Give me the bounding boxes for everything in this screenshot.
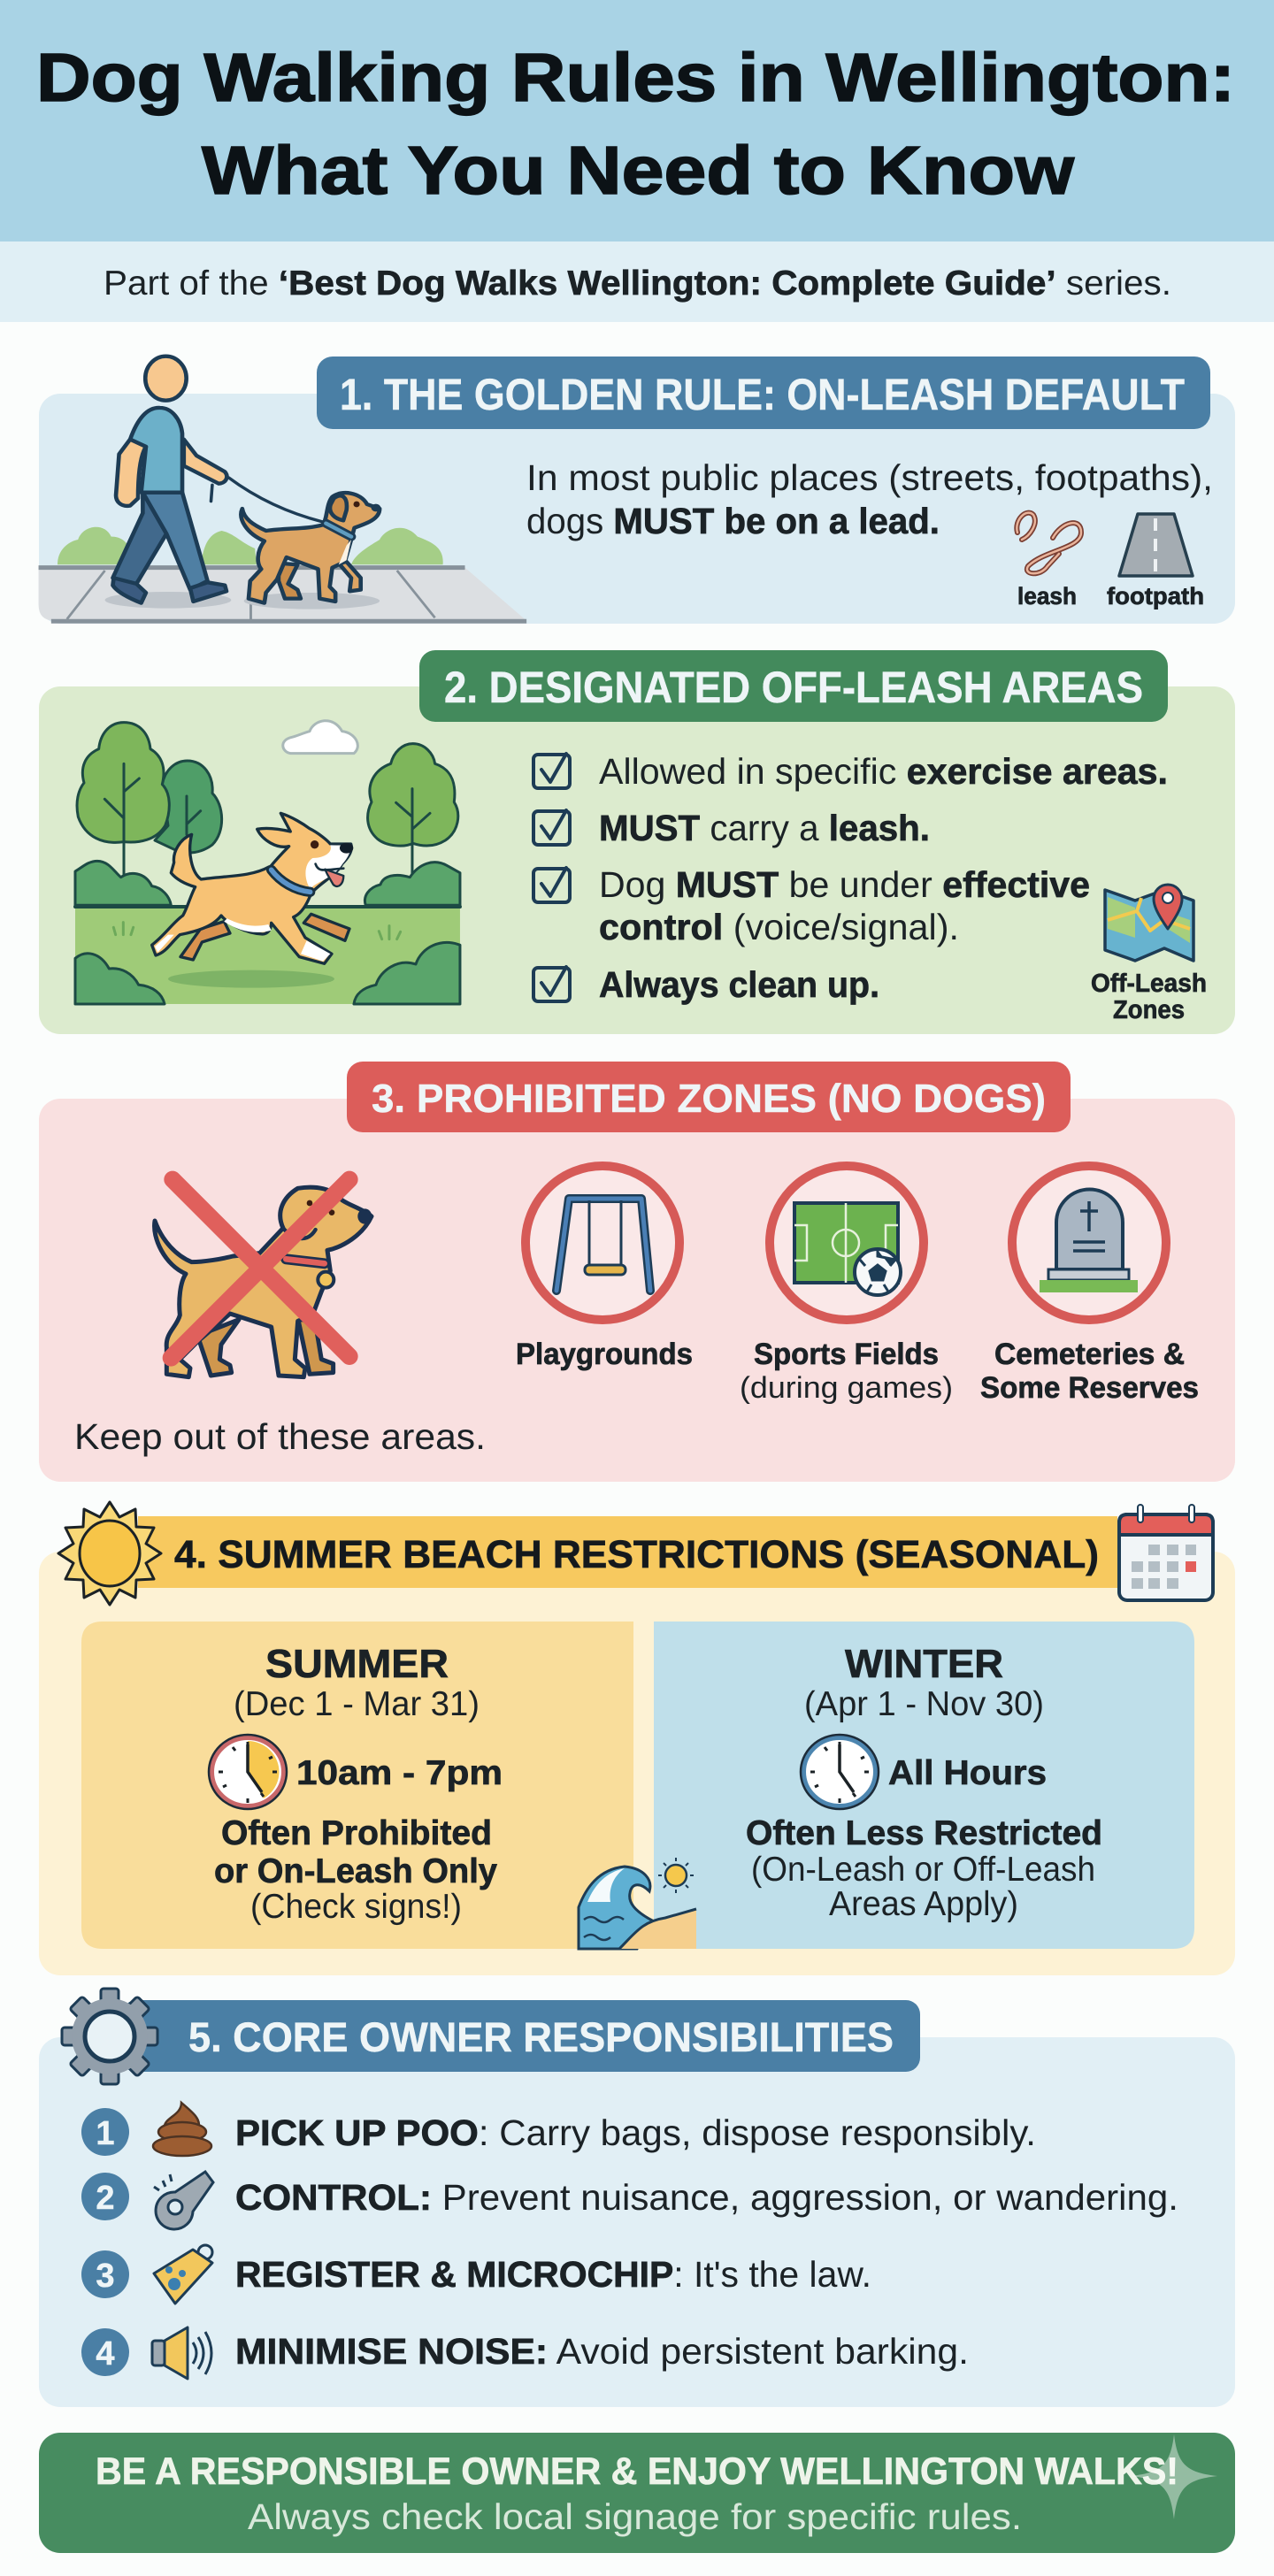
title: Dog Walking Rules in Wellington:: [36, 40, 1235, 116]
row 4: minimise noise: [81, 2327, 969, 2379]
icon: winter clock: [801, 1735, 879, 1809]
heading: section 4: 4. SUMMER BEACH RESTRICTIONS (SEASONAL): [174, 1533, 1099, 1576]
panel: seasonal background: [39, 1552, 1235, 1975]
icon: beach wave and sun: [579, 1858, 696, 1949]
check: exercise areas: Allowed in specific exercise areas.: [599, 751, 1168, 792]
row 2: control: [81, 2172, 1178, 2229]
row 4: minimise noise: 4: [96, 2335, 115, 2373]
check: clean up: Always clean up.: [599, 964, 879, 1005]
icon: speaker: [152, 2327, 211, 2379]
panel: winter: All Hours: [888, 1754, 1047, 1792]
panel: summer: or On-Leash Only: [214, 1852, 497, 1890]
panel: winter: [654, 1622, 1194, 1949]
panel: summer: 10am - 7pm: [296, 1754, 503, 1792]
heading: section 1: 1. THE GOLDEN RULE: ON-LEASH DEFAULT: [340, 370, 1185, 419]
panel: winter: Often Less Restricted: [746, 1814, 1102, 1852]
label: off-leash zones: [1091, 970, 1207, 1024]
check: effective control: Dog MUST be under effective: [599, 864, 1090, 905]
panel: summer: Often Prohibited: [221, 1814, 492, 1852]
panel: off-leash background: [39, 686, 1235, 1034]
row 1: pick up poo: PICK UP POO: Carry bags, dispose responsibly.: [235, 2112, 1036, 2153]
label: cemeteries: [980, 1338, 1199, 1405]
illustration: dog running in park: [75, 721, 460, 1004]
check: effective control: [533, 864, 1090, 947]
panel: winter: (Apr 1 - Nov 30): [804, 1685, 1044, 1723]
heading: section 3: [347, 1062, 1071, 1132]
footer subline: Always check local signage for specific rules.: [248, 2496, 1022, 2537]
subtitle band: Part of the ‘Best Dog Walks Wellington: Complete Guide’ series.: [104, 264, 1171, 303]
panel: winter: WINTER: [845, 1641, 1003, 1686]
icon: leash: [1017, 513, 1081, 573]
title banner: [0, 0, 1274, 242]
label: off-leash zones: Zones: [1113, 996, 1185, 1024]
section 4: summer beach restrictions: [39, 1502, 1235, 1975]
panel: summer: SUMMER: [265, 1641, 449, 1686]
panel: winter: Areas Apply): [829, 1885, 1018, 1923]
icon: sparkle: [1131, 2434, 1217, 2519]
row 1: pick up poo: 1: [96, 2115, 115, 2152]
heading: section 4: [138, 1516, 1117, 1588]
icon: crossed-out dog: [155, 1179, 372, 1377]
heading: section 5: 5. CORE OWNER RESPONSIBILITIES: [188, 2013, 894, 2060]
label: footpath: footpath: [1107, 583, 1204, 610]
row 4: minimise noise: MINIMISE NOISE: Avoid persistent barking.: [235, 2331, 969, 2372]
panel: summer: (Dec 1 - Mar 31): [234, 1685, 480, 1723]
panel: golden rule background: [39, 394, 1235, 624]
icon: gear: [62, 1989, 157, 2084]
label: cemeteries: Cemeteries &: [994, 1338, 1185, 1371]
text: keep out: Keep out of these areas.: [74, 1416, 486, 1457]
row 3: register: [81, 2245, 871, 2304]
icon: calendar: [1119, 1505, 1213, 1600]
row 2: control: 2: [96, 2180, 115, 2217]
label: sports fields: Sports Fields: [754, 1338, 939, 1371]
label: sports fields: [740, 1338, 953, 1405]
heading: section 3: 3. PROHIBITED ZONES (NO DOGS): [372, 1076, 1046, 1121]
text: on-lead rule: dogs MUST be on a lead.: [526, 501, 940, 541]
subtitle band: [0, 242, 1274, 322]
text: on-lead rule: In most public places (streets, footpaths),: [526, 457, 1213, 498]
title: [36, 40, 1235, 209]
icon: no playgrounds: [526, 1166, 679, 1320]
illustration: person walking dog on footpath: [39, 356, 526, 621]
row 2: control: CONTROL: Prevent nuisance, aggression, or wandering.: [235, 2177, 1178, 2218]
icon: sun: [58, 1502, 161, 1605]
row 3: register: 3: [96, 2258, 115, 2295]
row 1: pick up poo: [81, 2103, 1036, 2156]
icon: poo: [153, 2103, 211, 2156]
label: leash: leash: [1017, 583, 1077, 610]
label: cemeteries: Some Reserves: [980, 1371, 1199, 1405]
heading: section 5: [122, 2000, 920, 2072]
icon: no cemeteries: [1012, 1166, 1166, 1320]
icon: footpath: [1119, 514, 1193, 576]
panel: prohibited background: [39, 1099, 1235, 1482]
title: What You Need to Know: [202, 133, 1075, 209]
heading: section 2: [419, 650, 1168, 722]
section 1: golden rule: [39, 356, 1235, 624]
icon: off-leash map: [1105, 885, 1193, 961]
check: carry a leash: MUST carry a leash.: [599, 808, 930, 848]
icon: dog tag: [154, 2245, 212, 2304]
section 3: prohibited zones: [39, 1062, 1235, 1482]
heading: section 1: [317, 356, 1210, 429]
panel: responsibilities background: [39, 2037, 1235, 2407]
label: sports fields: (during games): [740, 1371, 953, 1405]
icon: summer clock: [209, 1735, 287, 1809]
row 3: register: REGISTER & MICROCHIP: It's the law.: [235, 2254, 871, 2295]
label: off-leash zones: Off-Leash: [1091, 970, 1207, 998]
footer headline: BE A RESPONSIBLE OWNER & ENJOY WELLINGTON WALKS!: [96, 2450, 1178, 2493]
heading: section 2: 2. DESIGNATED OFF-LEASH AREAS: [444, 663, 1143, 712]
label: playgrounds: Playgrounds: [516, 1338, 693, 1371]
section 5: core responsibilities: [39, 1989, 1235, 2407]
section 2: off-leash areas: [39, 650, 1235, 1034]
text: on-lead rule: [526, 457, 1213, 541]
checklist: [533, 751, 1168, 1005]
icon: whistle: [154, 2172, 213, 2229]
icon: no sports fields: [770, 1166, 924, 1320]
check: effective control: control (voice/signal).: [599, 907, 959, 947]
panel: summer: (Check signs!): [250, 1888, 462, 1926]
panel: summer: [81, 1622, 633, 1949]
footer banner: [39, 2433, 1235, 2553]
panel: winter: (On-Leash or Off-Leash: [751, 1851, 1095, 1889]
